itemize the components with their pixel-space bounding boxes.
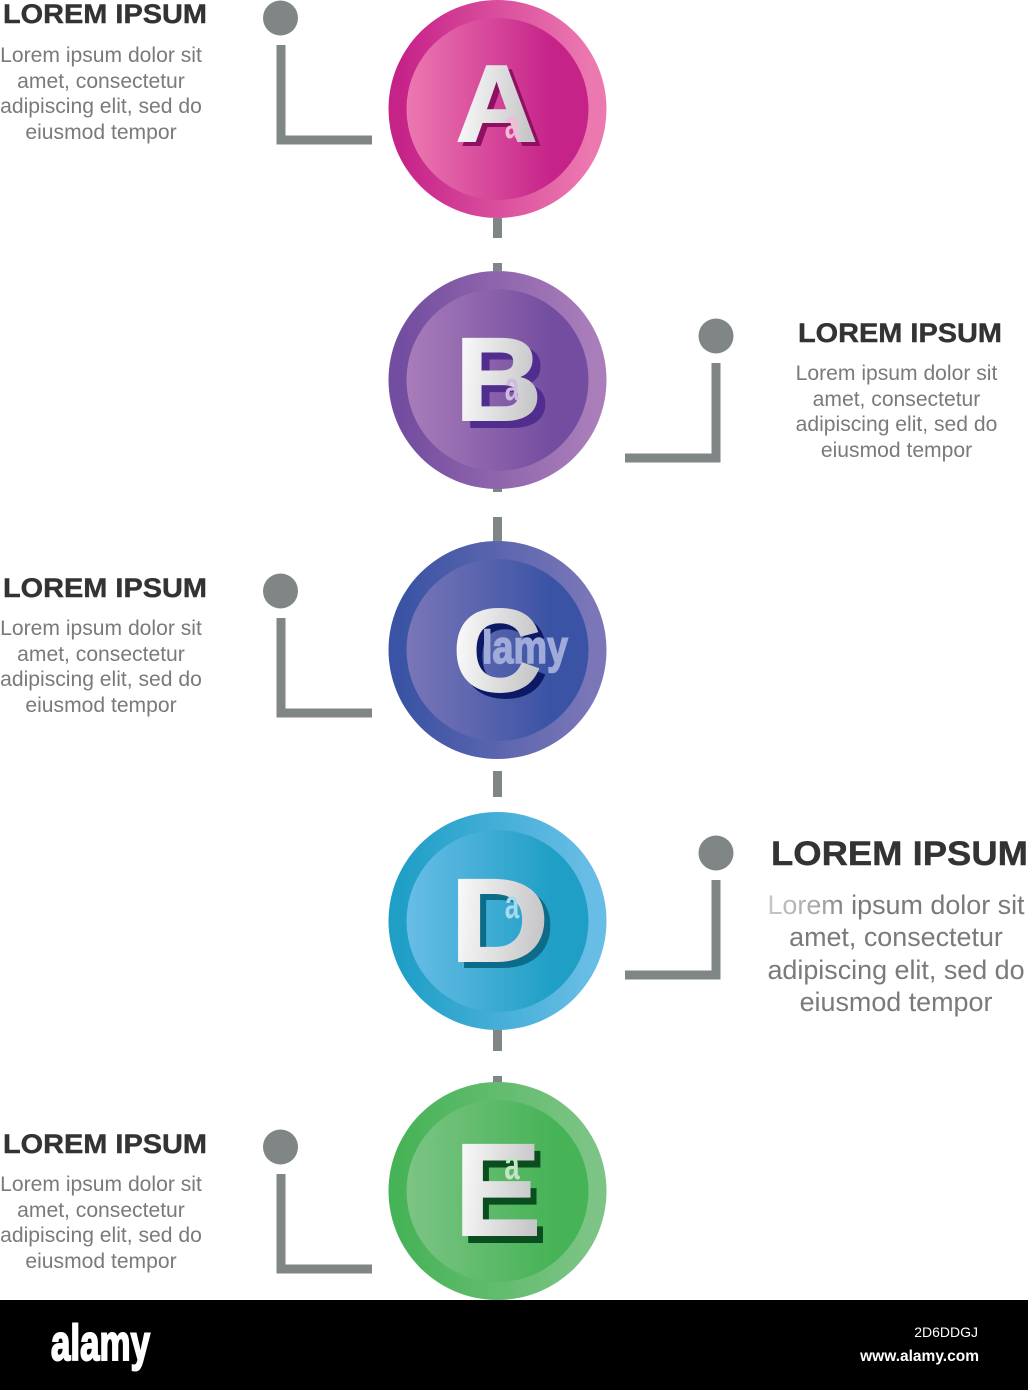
circle E: [388, 1082, 606, 1300]
text block E: eiusmod tempor: [25, 1250, 177, 1273]
alamy logo: alamy: [51, 1315, 150, 1371]
callout connector E: [263, 1130, 372, 1269]
text block D: Lorem ipsum dolor sit: [767, 890, 1025, 920]
callout connector D: [625, 836, 734, 975]
circle D: [388, 812, 606, 1030]
text block A: eiusmod tempor: [25, 121, 177, 144]
text block C: Lorem ipsum dolor sit: [0, 617, 202, 640]
text block E: [0, 1173, 202, 1273]
text block C: eiusmod tempor: [25, 694, 177, 717]
letter D: D: [456, 861, 555, 993]
letter B: B: [463, 321, 550, 453]
dashed connector between circles: [493, 218, 502, 1083]
text block D: amet, consectetur: [789, 922, 1003, 952]
heading E: LOREM IPSUM: [3, 1129, 207, 1159]
letter C: lamy: [482, 621, 569, 673]
circle A: [388, 0, 606, 218]
text block A: adipiscing elit, sed do: [0, 95, 202, 118]
heading B: LOREM IPSUM: [798, 318, 1002, 348]
heading C: LOREM IPSUM: [3, 573, 207, 603]
text block C: adipiscing elit, sed do: [0, 668, 202, 691]
text block B: adipiscing elit, sed do: [796, 413, 997, 436]
letter A: a: [505, 102, 519, 147]
image id: 2D6DDGJ: [914, 1324, 978, 1340]
website: www.alamy.com: [859, 1348, 979, 1365]
circle B: [388, 271, 606, 489]
text block E: amet, consectetur: [17, 1199, 185, 1222]
text block C: [0, 617, 202, 717]
watermark fade over text: [765, 892, 850, 922]
letter E: E: [461, 1123, 547, 1270]
text block B: Lorem ipsum dolor sit: [796, 362, 997, 385]
watermark footer bar: [0, 1300, 1028, 1390]
text block D: eiusmod tempor: [800, 987, 992, 1017]
text block E: adipiscing elit, sed do: [0, 1224, 202, 1247]
text block B: amet, consectetur: [813, 388, 980, 411]
letter B: B: [455, 314, 542, 446]
letter B: a: [505, 364, 519, 409]
text block A: [0, 44, 202, 144]
text block E: Lorem ipsum dolor sit: [0, 1173, 202, 1196]
text block A: amet, consectetur: [17, 70, 185, 93]
callout connector A: [263, 0, 372, 140]
circle C: [388, 541, 606, 759]
text block B: eiusmod tempor: [821, 439, 972, 462]
text block D: [767, 890, 1025, 1017]
letter C: C: [453, 586, 541, 716]
text block B: [796, 362, 997, 462]
letter D: a: [505, 882, 519, 927]
letter E: E: [455, 1116, 541, 1263]
letter A: A: [456, 43, 537, 165]
text block A: Lorem ipsum dolor sit: [0, 44, 202, 67]
letter C: C: [459, 592, 547, 722]
letter D: D: [450, 855, 549, 987]
letter E: a: [504, 1141, 520, 1188]
callout connector B: [625, 318, 734, 458]
heading D: LOREM IPSUM: [771, 835, 1028, 873]
text block D: adipiscing elit, sed do: [767, 955, 1025, 985]
letter A: A: [461, 47, 542, 169]
text block C: amet, consectetur: [17, 643, 185, 666]
callout connector C: [263, 574, 372, 713]
